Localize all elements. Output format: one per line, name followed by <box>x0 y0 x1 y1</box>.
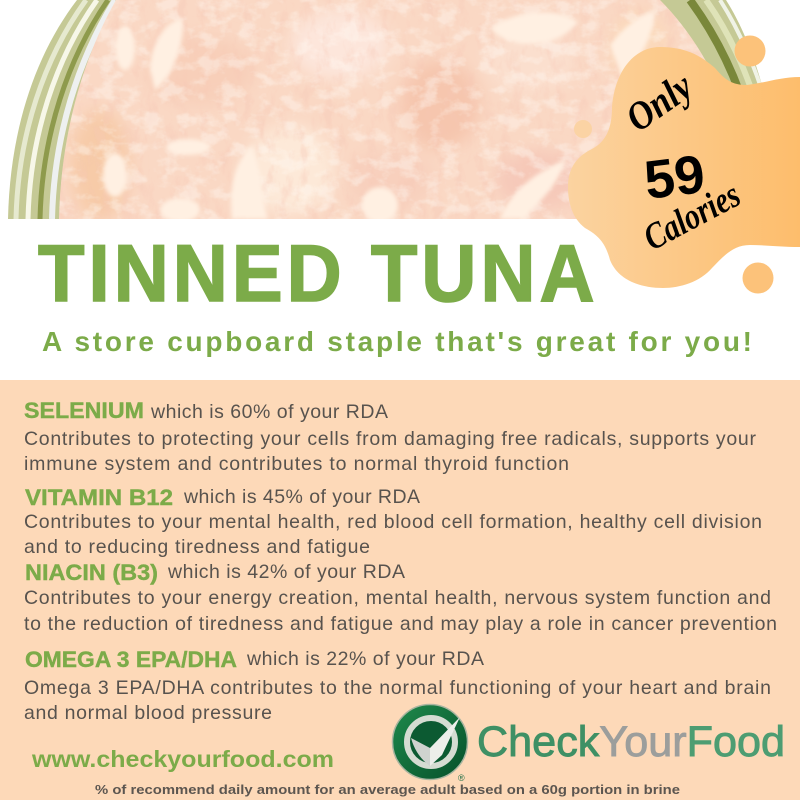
pale flakes <box>103 10 655 223</box>
logo wordmark: CheckYourFood <box>477 718 785 766</box>
website link: www.checkyourfood.com <box>31 746 334 772</box>
nutrient: niacin <box>24 560 777 635</box>
calorie number: 59 <box>641 144 708 211</box>
calories label: Calories <box>637 174 747 259</box>
niacin heading: NIACIN (B3) <box>25 560 158 585</box>
callout: calories <box>568 36 800 294</box>
meat grain texture <box>260 15 376 210</box>
only label: Only <box>617 63 701 140</box>
niacin description: Contributes to your energy creation, mental health, nervous system function and <box>24 587 771 609</box>
registered mark: ® <box>458 773 465 783</box>
callout shape <box>568 47 800 288</box>
soft colour patches <box>70 10 670 220</box>
panel: nutrients background <box>0 380 800 800</box>
rim highlights <box>16 0 772 219</box>
vitamin b12 description: Contributes to your mental health, red blood cell formation, healthy cell division <box>24 511 762 533</box>
omega 3 description: Omega 3 EPA/DHA contributes to the normal functioning of your heart and brain <box>24 677 771 699</box>
icon: check badge <box>392 704 468 780</box>
tin rim <box>8 0 785 219</box>
top dot <box>734 36 766 66</box>
selenium description: Contributes to protecting your cells from damaging free radicals, supports your <box>24 428 757 450</box>
vitamin b12 description: and to reducing tiredness and fatigue <box>24 536 370 558</box>
tuna flakes <box>59 0 706 219</box>
pale grain texture <box>60 0 706 219</box>
footnote: % of recommend daily amount for an average adult based on a 60g portion in brine <box>95 782 680 797</box>
omega 3 heading: OMEGA 3 EPA/DHA <box>25 647 237 672</box>
logo: check your food <box>392 704 785 783</box>
subtitle: A store cupboard staple that's great for you! <box>42 326 752 357</box>
selenium description: immune system and contributes to normal thyroid function <box>24 453 569 475</box>
nutrient: selenium <box>24 398 757 475</box>
niacin rda: which is 42% of your RDA <box>167 561 405 583</box>
vitamin b12 rda: which is 45% of your RDA <box>183 486 420 508</box>
selenium heading: SELENIUM <box>24 398 144 423</box>
nutrient: omega 3 <box>24 647 771 724</box>
title: TINNED TUNA <box>38 228 594 319</box>
faint dot <box>574 120 592 138</box>
niacin description: to the reduction of tiredness and fatigue and may play a role in cancer prevention <box>24 613 777 635</box>
omega 3 description: and normal blood pressure <box>24 702 272 724</box>
vitamin b12 heading: VITAMIN B12 <box>25 485 173 510</box>
photo: tin of tuna <box>0 0 800 223</box>
selenium rda: which is 60% of your RDA <box>150 401 388 423</box>
nutrient: vitamin b12 <box>24 485 762 558</box>
omega 3 rda: which is 22% of your RDA <box>246 648 484 670</box>
bottom dot <box>742 262 774 294</box>
